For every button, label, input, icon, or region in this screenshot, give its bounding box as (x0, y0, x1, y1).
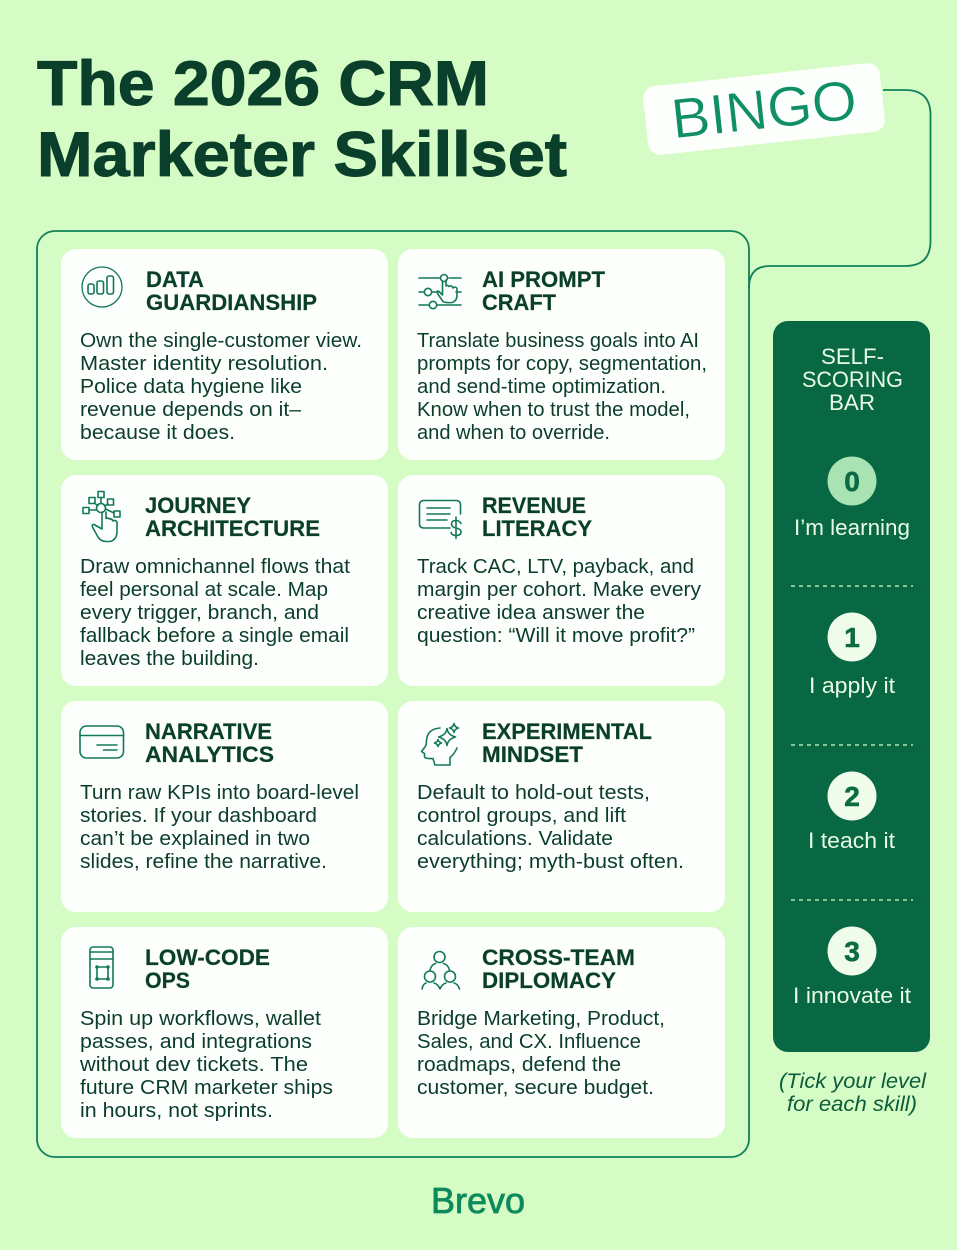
heading: NARRATIVE (145, 719, 272, 744)
level 1: 1 (844, 622, 860, 653)
text block: prompts for copy, segmentation, (417, 352, 707, 375)
heading: CROSS-TEAM (482, 945, 635, 970)
text block: future CRM marketer ships (80, 1076, 333, 1099)
heading: GUARDIANSHIP (146, 290, 317, 315)
text block: margin per cohort. Make every (417, 578, 702, 601)
level 2: I teach it (808, 828, 895, 853)
heading: EXPERIMENTAL (482, 719, 652, 744)
text block (80, 329, 362, 444)
text block: and send-time optimization. (417, 375, 666, 398)
heading: AI PROMPT (482, 267, 606, 292)
icon: card (80, 726, 124, 758)
text block: Master identity resolution. (80, 352, 328, 375)
level 0: 0 (844, 466, 860, 497)
heading: LITERACY (482, 516, 592, 541)
panel heading: SCORING (802, 367, 903, 392)
text block: passes, and integrations (80, 1030, 312, 1053)
panel: skills outline (37, 231, 749, 1157)
text block: leaves the building. (80, 647, 259, 670)
tick your level note: (Tick your level (779, 1069, 927, 1093)
heading: ARCHITECTURE (145, 516, 320, 541)
icon: three connected people (422, 952, 460, 989)
level 0 (794, 456, 910, 540)
icon: document with dollar sign (420, 500, 461, 538)
heading: JOURNEY (145, 493, 251, 518)
connector line from bingo tag to scoring panel (749, 90, 930, 288)
text block: Draw omnichannel flows that (80, 555, 350, 578)
tick your level note: for each skill) (787, 1092, 917, 1116)
text block (80, 781, 359, 873)
bingo tag: BINGO (668, 68, 860, 150)
card: narrative analytics (61, 701, 388, 912)
heading: CRAFT (482, 290, 557, 315)
card: data guardianship (61, 249, 388, 460)
text block: Bridge Marketing, Product, (417, 1007, 665, 1030)
text block: calculations. Validate (417, 827, 613, 850)
text block: Know when to trust the model, (417, 398, 690, 421)
card: experimental mindset (398, 701, 725, 912)
icon: head with sparkles (422, 724, 458, 765)
heading: DIPLOMACY (482, 968, 616, 993)
text block: Police data hygiene like (80, 375, 302, 398)
level 3: 3 (844, 936, 860, 967)
text block: creative idea answer the (417, 601, 645, 624)
text block: in hours, not sprints. (80, 1099, 273, 1122)
panel heading: BAR (829, 390, 875, 415)
card: cross-team diplomacy (398, 927, 725, 1138)
card: revenue literacy (398, 475, 725, 686)
brevo logo: Brevo (431, 1180, 525, 1221)
panel heading (802, 344, 903, 415)
text block: can’t be explained in two (80, 827, 310, 850)
text block: Default to hold-out tests, (417, 781, 650, 804)
heading: DATA (146, 267, 204, 292)
text block: Own the single-customer view. (80, 329, 362, 352)
heading (482, 719, 652, 767)
bingo tag (642, 62, 886, 156)
text block (417, 781, 684, 873)
text block (417, 555, 702, 647)
text block (417, 1007, 665, 1099)
text block (417, 329, 707, 444)
text block: question: “Will it move profit?” (417, 624, 695, 647)
card: journey architecture (61, 475, 388, 686)
text block: because it does. (80, 421, 235, 444)
text block: control groups, and lift (417, 804, 626, 827)
level 3: I innovate it (793, 983, 911, 1008)
panel heading: SELF- (821, 344, 884, 369)
heading: REVENUE (482, 493, 586, 518)
text block: everything; myth-bust often. (417, 850, 684, 873)
text block: Sales, and CX. Influence (417, 1030, 641, 1053)
heading (145, 493, 320, 541)
text block: roadmaps, defend the (417, 1053, 621, 1076)
text block (80, 555, 350, 670)
tick your level note (779, 1069, 927, 1116)
heading: ANALYTICS (145, 742, 274, 767)
text block: without dev tickets. The (79, 1053, 308, 1076)
heading (146, 267, 317, 315)
level 3 (793, 926, 911, 1008)
level 1: I apply it (809, 673, 895, 698)
text block: and when to override. (417, 421, 610, 444)
text block: feel personal at scale. Map (80, 578, 328, 601)
text block: customer, secure budget. (417, 1076, 654, 1099)
title (37, 49, 567, 190)
icon: mobile app builder (90, 947, 113, 988)
title: The 2026 CRM (37, 49, 489, 119)
card: low-code ops (61, 927, 388, 1138)
heading: MINDSET (482, 742, 584, 767)
text block: Spin up workflows, wallet (80, 1007, 321, 1030)
text block: every trigger, branch, and (80, 601, 319, 624)
level 0: I’m learning (794, 515, 910, 540)
text block: revenue depends on it– (80, 398, 302, 421)
text block: Turn raw KPIs into board-level (80, 781, 359, 804)
text block: slides, refine the narrative. (80, 850, 327, 873)
title: Marketer Skillset (37, 120, 567, 190)
level 2 (808, 772, 895, 853)
panel: self-scoring bar (773, 321, 930, 1052)
text block: stories. If your dashboard (80, 804, 317, 827)
text block: Translate business goals into AI (417, 329, 699, 352)
icon: sliders with pointer hand (419, 274, 461, 309)
text block: fallback before a single email (80, 624, 349, 647)
text block: Track CAC, LTV, payback, and (417, 555, 694, 578)
heading: LOW-CODE (145, 945, 270, 970)
icon: node network with hand (83, 492, 120, 542)
heading (145, 719, 274, 767)
text block (79, 1007, 333, 1122)
heading (482, 267, 606, 315)
card: ai prompt craft (398, 249, 725, 460)
heading (482, 493, 592, 541)
heading (145, 945, 270, 993)
level 2: 2 (844, 781, 860, 812)
level 1 (809, 612, 895, 698)
icon: bar chart in circle (82, 267, 122, 307)
heading (482, 945, 635, 993)
heading: OPS (145, 968, 190, 993)
